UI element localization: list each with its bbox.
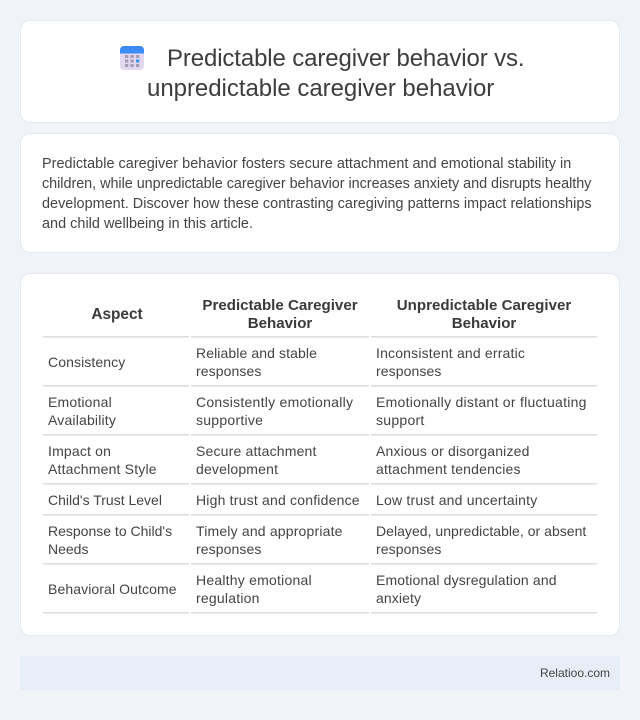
table header: Unpredictable Caregiver (397, 297, 571, 314)
row: attachment style: development (196, 461, 278, 477)
row: consistency: Inconsistent and erratic (376, 345, 525, 361)
footer bar (20, 656, 620, 690)
row: trust level: Low trust and uncertainty (376, 492, 537, 508)
title: unpredictable caregiver behavior (147, 75, 494, 102)
footer credit: Relatioo.com (540, 666, 610, 680)
row: behavioral outcome: Healthy emotional (196, 572, 312, 588)
intro paragraph: Predictable caregiver behavior fosters secure attachment and emotional stability in (42, 156, 571, 172)
icon: calendar (120, 46, 144, 70)
table header: Aspect (91, 306, 143, 323)
row: response to needs: responses (376, 541, 442, 557)
row: emotional availability (48, 394, 587, 428)
row: behavioral outcome: Emotional dysregulation and (376, 572, 557, 588)
title: Predictable caregiver behavior vs. (167, 45, 524, 72)
row: consistency: responses (196, 363, 262, 379)
row: behavioral outcome: anxiety (376, 590, 421, 606)
panel: title card (20, 20, 620, 123)
table header: Behavior (452, 315, 516, 332)
title (147, 45, 524, 102)
row: trust level: High trust and confidence (196, 492, 360, 508)
table (43, 297, 597, 614)
row: trust level (48, 492, 538, 508)
intro paragraph: development. Discover how these contrasting caregiving patterns impact relationships (42, 196, 592, 212)
row: emotional availability: Emotional (48, 394, 112, 410)
intro paragraph (42, 156, 592, 232)
row: emotional availability: Availability (48, 412, 116, 428)
row: response to needs: Timely and appropriate (196, 523, 343, 539)
row: response to needs: Delayed, unpredictable, or absent (376, 523, 586, 539)
row: attachment style: Anxious or disorganized (376, 443, 530, 459)
intro paragraph: and child wellbeing in this article. (42, 216, 253, 232)
panel: comparison table card (20, 273, 620, 636)
table header: Behavior (248, 315, 312, 332)
row: attachment style (48, 443, 530, 477)
row: response to needs: Needs (48, 541, 88, 557)
row: emotional availability: Emotionally distant or fluctuating (376, 394, 587, 410)
row: trust level: Child's Trust Level (48, 492, 162, 508)
row: behavioral outcome: regulation (196, 590, 260, 606)
row: emotional availability: supportive (196, 412, 263, 428)
table header: Predictable Caregiver (202, 297, 358, 314)
table header (91, 297, 572, 332)
row: response to needs: Response to Child's (48, 523, 172, 539)
row: response to needs (48, 523, 586, 557)
row: emotional availability: support (376, 412, 425, 428)
intro paragraph: children, while unpredictable caregiver behavior increases anxiety and disrupts healthy (42, 176, 591, 192)
row: attachment style: Impact on (48, 443, 111, 459)
row: behavioral outcome (48, 572, 557, 606)
row: consistency: responses (376, 363, 442, 379)
row: consistency (48, 345, 525, 379)
row: attachment style: attachment tendencies (376, 461, 521, 477)
row: behavioral outcome: Behavioral Outcome (48, 581, 177, 597)
row: response to needs: responses (196, 541, 262, 557)
row: emotional availability: Consistently emotionally (196, 394, 353, 410)
panel: intro text card (20, 133, 620, 253)
row: attachment style: Attachment Style (48, 461, 157, 477)
row: consistency: Reliable and stable (196, 345, 317, 361)
row: consistency: Consistency (48, 354, 125, 370)
row: attachment style: Secure attachment (196, 443, 317, 459)
